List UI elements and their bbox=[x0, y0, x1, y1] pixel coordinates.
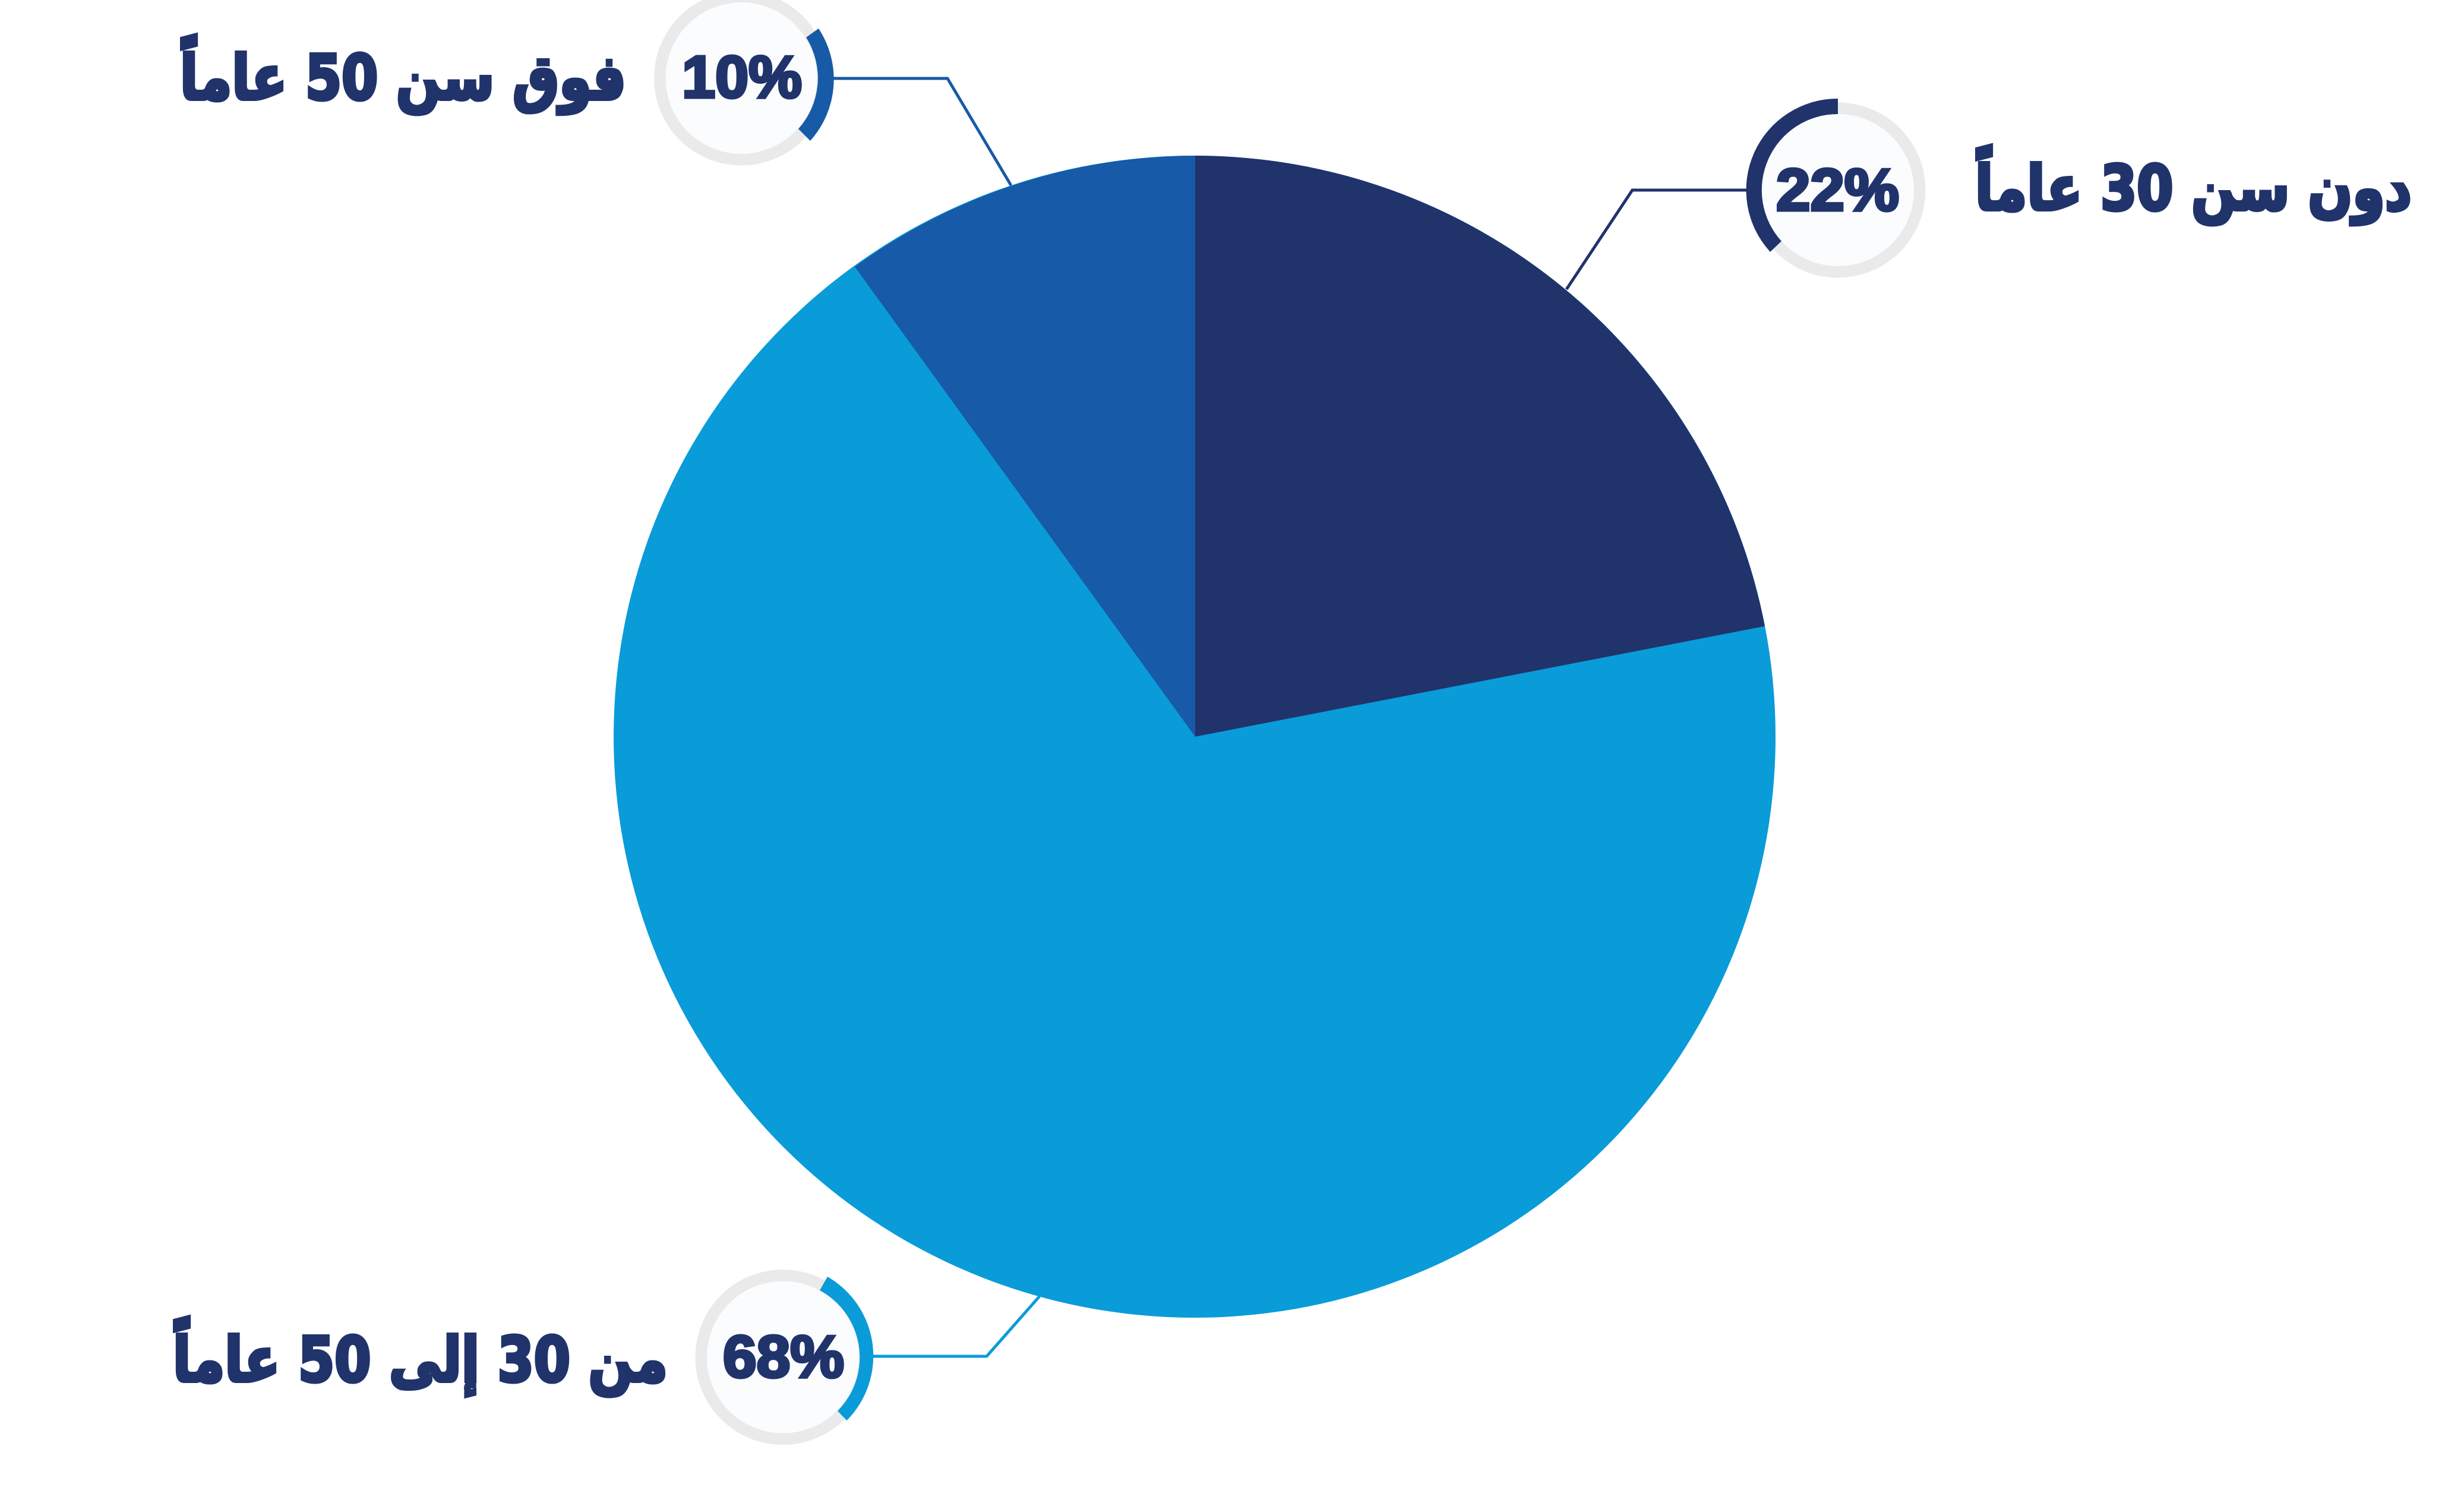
pie chart bbox=[614, 156, 1776, 1318]
badge: 68% bbox=[695, 1270, 873, 1445]
label: under 30 years: دون سن 30 عاماً bbox=[1975, 145, 2412, 225]
label: over 50 years: فوق سن 50 عاماً bbox=[180, 34, 626, 114]
badge: 68%: 68% bbox=[723, 1324, 844, 1390]
badge: 22% bbox=[1746, 99, 1926, 278]
leader line: 22% bbox=[1566, 190, 1749, 289]
badge: 22%: 22% bbox=[1776, 157, 1899, 223]
leader line: 10% bbox=[830, 78, 1011, 185]
slice: over 50 years, 10% bbox=[855, 156, 1195, 737]
slice: under 30 years, 22% bbox=[1195, 156, 1765, 737]
leader line: 68% bbox=[871, 1296, 1040, 1356]
badge: 10%: 10% bbox=[682, 44, 802, 111]
label: 30 to 50 years: من 30 إلى 50 عاماً bbox=[173, 1316, 668, 1397]
badge: 10% bbox=[654, 0, 834, 165]
slice: 30 to 50 years, 68% bbox=[614, 156, 1776, 1318]
